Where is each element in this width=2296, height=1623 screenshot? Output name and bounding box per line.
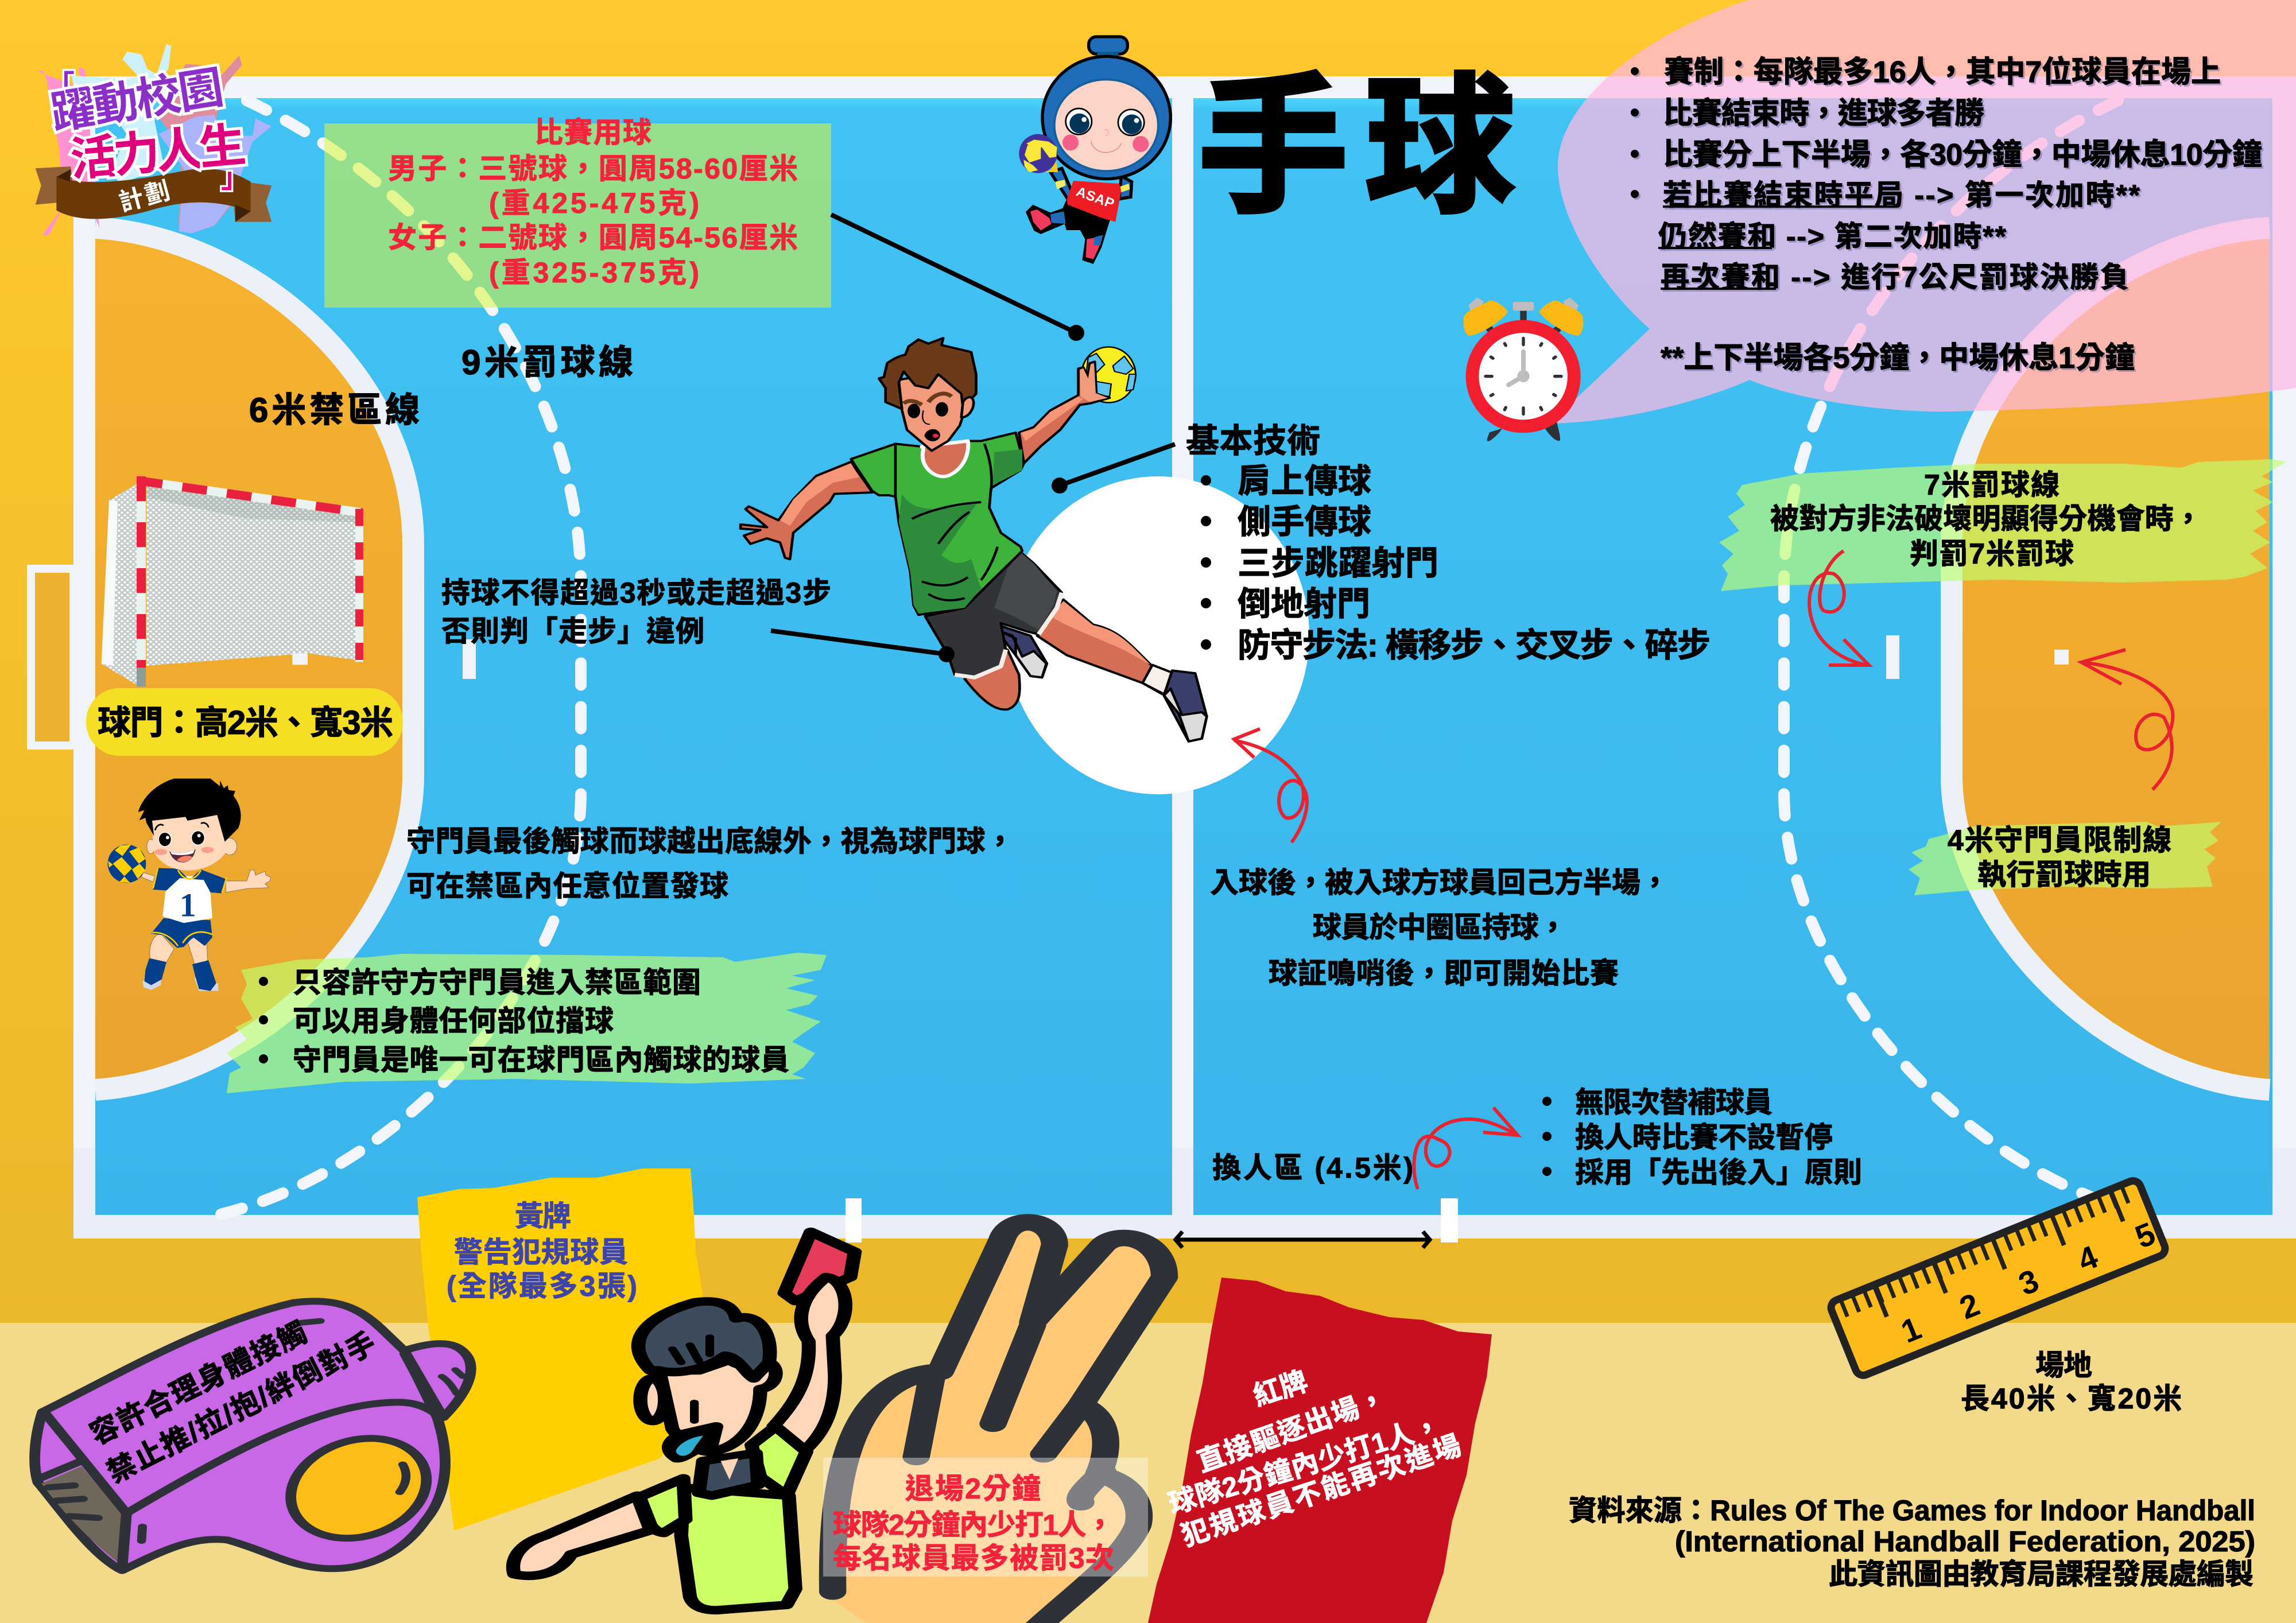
icon: alarm clock (1464, 297, 1583, 441)
text block: substitution zone: 採用「先出後入」原則 (1575, 1156, 1862, 1189)
icon: boy goalkeeper (108, 779, 271, 991)
text block: restart after goal: 球員於中圈區持球， (1313, 911, 1567, 943)
logo: Active Campus programme: 躍動校園 (47, 61, 227, 139)
speech bubble: rules of play: 比賽分上下半場，各30分鐘，中場休息10分鐘 (1663, 138, 2262, 172)
text: court size (1961, 1349, 2182, 1415)
list: basic skills: 肩上傳球 (1238, 463, 1371, 500)
panel: match ball: 比賽用球 (534, 117, 651, 149)
icon: mascot with ball (1019, 37, 1170, 262)
logo: Active Campus programme: 「 (46, 70, 75, 102)
list: basic skills (1186, 422, 1711, 664)
panel: red card: 球隊2分鐘內少打1人， (1165, 1411, 1445, 1520)
panel: goalkeeper rules: 可以用身體任何部位擋球 (293, 1005, 614, 1037)
label: 6m line: 6米禁區線 (249, 391, 420, 429)
panel: yellow card: 警告犯規球員 (454, 1236, 628, 1268)
arrow: to 7m mark (1809, 551, 1869, 665)
panel: yellow card (417, 1168, 706, 1531)
text: source (1569, 1494, 2255, 1590)
list: basic skills: 基本技術 (1186, 422, 1320, 460)
icon: ruler: 5 (2130, 1215, 2160, 1255)
label pill: goal size: 球門：高2米、寬3米 (98, 704, 393, 741)
title: 手球 (1198, 63, 1515, 231)
speech bubble: rules of play: 賽制：每隊最多16人，其中7位球員在場上 (1664, 56, 2221, 89)
panel: match ball: (重425-475克) (489, 187, 699, 219)
speech bubble: rules of play: **上下半場各5分鐘，中場休息1分鐘 (1661, 341, 2135, 375)
arrow: to 4m mark (2081, 650, 2173, 790)
text block: substitution zone: 無限次替補球員 (1575, 1086, 1773, 1119)
panel: goalkeeper rules: 只容許守方守門員進入禁區範圍 (293, 966, 701, 999)
panel: yellow card: (全隊最多3張) (447, 1270, 637, 1302)
text block: goal throw (406, 825, 1014, 902)
icon: ruler: 2 (1954, 1286, 1984, 1326)
panel: 2-minute suspension (823, 1458, 1148, 1577)
text block: substitution zone (1212, 1086, 1862, 1189)
panel: 7m throw: 判罰7米罰球 (1910, 538, 2074, 570)
panel: match ball: 男子：三號球，圓周58-60厘米 (388, 153, 798, 185)
label: 9m line: 9米罰球線 (461, 343, 633, 382)
speech bubble: rules of play: 再次賽和 --> 進行7公尺罰球決勝負 (1661, 261, 2129, 293)
panel: 2-minute suspension: 每名球員最多被罰3次 (833, 1542, 1114, 1574)
icon: handball player jumping (740, 338, 1207, 741)
text: source: 資料來源：Rules Of The Games for Indoor Handball (1569, 1494, 2255, 1527)
panel: red card: 紅牌 (1250, 1366, 1312, 1412)
text: whistle physical contact rule: 禁止推/拉/抱/絆倒對手 (102, 1326, 381, 1489)
logo: Active Campus programme: 活力人生 (68, 119, 248, 187)
speech bubble: rules of play (1550, 0, 2296, 424)
panel: 2-minute suspension: 球隊2分鐘內少打1人， (833, 1509, 1114, 1541)
text: whistle physical contact rule: 容許合理身體接觸 (85, 1316, 312, 1451)
speech bubble: rules of play: 若比賽結束時平局 --> 第一次加時** (1663, 179, 2140, 211)
text block: substitution zone: 換人區 (4.5米) (1212, 1152, 1413, 1184)
text: court size: 長40米、寬20米 (1961, 1383, 2182, 1415)
logo: Active Campus programme (36, 44, 272, 235)
text block: goal throw: 可在禁區內任意位置發球 (406, 870, 728, 902)
speech bubble: rules of play: 比賽結束時，進球多者勝 (1663, 97, 1984, 130)
panel: 4m line (1909, 822, 2221, 895)
list: basic skills: 倒地射門 (1238, 585, 1370, 623)
panel: match ball: (重325-375克) (489, 257, 699, 289)
panel: red card (1148, 1278, 1492, 1623)
text: source: 此資訊圖由教育局課程發展處編製 (1829, 1558, 2254, 1590)
panel: goalkeeper rules (227, 953, 827, 1093)
list: basic skills: 防守步法: 橫移步、交叉步、碎步 (1238, 627, 1711, 664)
logo: Active Campus programme: 計劃 (116, 177, 173, 217)
arrow: substitution zone width (1176, 1232, 1430, 1248)
list: basic skills: 三步跳躍射門 (1238, 545, 1438, 582)
panel: match ball: 女子：二號球，圓周54-56厘米 (388, 222, 798, 254)
text block: travelling rule (441, 577, 831, 647)
leader lines (771, 215, 1175, 662)
panel: goalkeeper rules: 守門員是唯一可在球門區內觸球的球員 (293, 1044, 789, 1076)
panel: 4m line: 4米守門員限制線 (1948, 824, 2171, 856)
icon: referee with red card (513, 1232, 855, 1610)
icon: goal (102, 476, 363, 687)
arrow: to substitution rules (1414, 1108, 1518, 1189)
logo: Active Campus programme: 」 (221, 162, 250, 194)
label pill: goal size (86, 688, 403, 756)
text block: restart after goal: 入球後，被入球方球員回己方半場， (1210, 867, 1669, 899)
text block: travelling rule: 持球不得超過3秒或走超過3步 (441, 577, 831, 609)
text: source: (International Handball Federation, 2025) (1675, 1525, 2255, 1558)
panel: 4m line: 執行罰球時用 (1977, 859, 2151, 891)
text block: restart after goal (1210, 867, 1669, 989)
text block: restart after goal: 球証鳴哨後，即可開始比賽 (1269, 957, 1619, 989)
text block: substitution zone: 換人時比賽不設暫停 (1575, 1121, 1833, 1154)
panel: 7m throw (1719, 459, 2286, 591)
icon: ruler: 1 (1896, 1310, 1926, 1350)
icon: mascot with ball: ASAP (1074, 184, 1116, 212)
icon: hand showing two fingers (833, 1222, 1165, 1623)
icon: ruler: 3 (2014, 1262, 2043, 1302)
list: basic skills: 側手傳球 (1238, 503, 1371, 541)
panel: 7m throw: 7米罰球線 (1924, 469, 2060, 501)
text block: goal throw: 守門員最後觸球而球越出底線外，視為球門球， (406, 825, 1014, 857)
speech bubble: rules of play: 仍然賽和 --> 第二次加時** (1658, 220, 2007, 253)
panel: 7m throw: 被對方非法破壞明顯得分機會時， (1770, 503, 2202, 535)
panel: red card: 犯規球員不能再次進場 (1178, 1430, 1465, 1552)
panel: 2-minute suspension: 退場2分鐘 (905, 1473, 1041, 1505)
arrow: to centre circle (1234, 729, 1307, 842)
panel: red card: 直接驅逐出場， (1193, 1383, 1390, 1478)
panel: match ball (324, 117, 831, 308)
icon: boy goalkeeper: 1 (180, 887, 196, 924)
handball court (31, 76, 2296, 1243)
panel: yellow card: 黃牌 (515, 1200, 571, 1232)
icon: ruler: 4 (2073, 1238, 2103, 1279)
icon: ruler (1829, 1178, 2167, 1378)
text: court size: 場地 (2035, 1349, 2092, 1381)
text block: travelling rule: 否則判「走步」違例 (441, 615, 704, 647)
icon: whistle (35, 1301, 471, 1571)
